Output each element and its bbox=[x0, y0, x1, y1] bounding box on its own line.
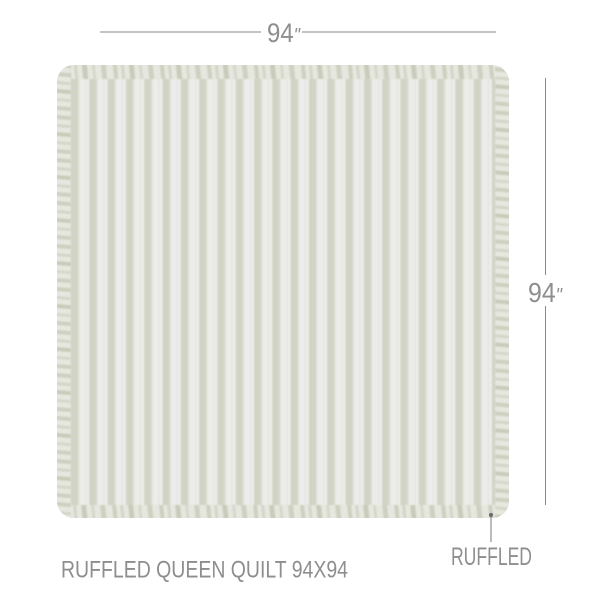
ruffled callout pointer bbox=[489, 513, 493, 542]
right dimension label: 94" bbox=[528, 277, 563, 308]
quilt bbox=[50, 60, 515, 525]
right dimension: line lower bbox=[544, 306, 546, 505]
right dimension: line upper bbox=[544, 78, 546, 275]
ruffled border bbox=[50, 60, 515, 525]
top dimension label: 94" bbox=[267, 18, 301, 48]
top dimension: line left bbox=[100, 31, 261, 33]
ruffled callout label: RUFFLED bbox=[451, 543, 532, 571]
product title: RUFFLED QUEEN QUILT 94X94 bbox=[61, 556, 348, 584]
top dimension: line right bbox=[302, 31, 496, 33]
striped quilt panel bbox=[71, 79, 495, 505]
infographic: ruffled queen quilt dimensions bbox=[57, 23, 563, 582]
